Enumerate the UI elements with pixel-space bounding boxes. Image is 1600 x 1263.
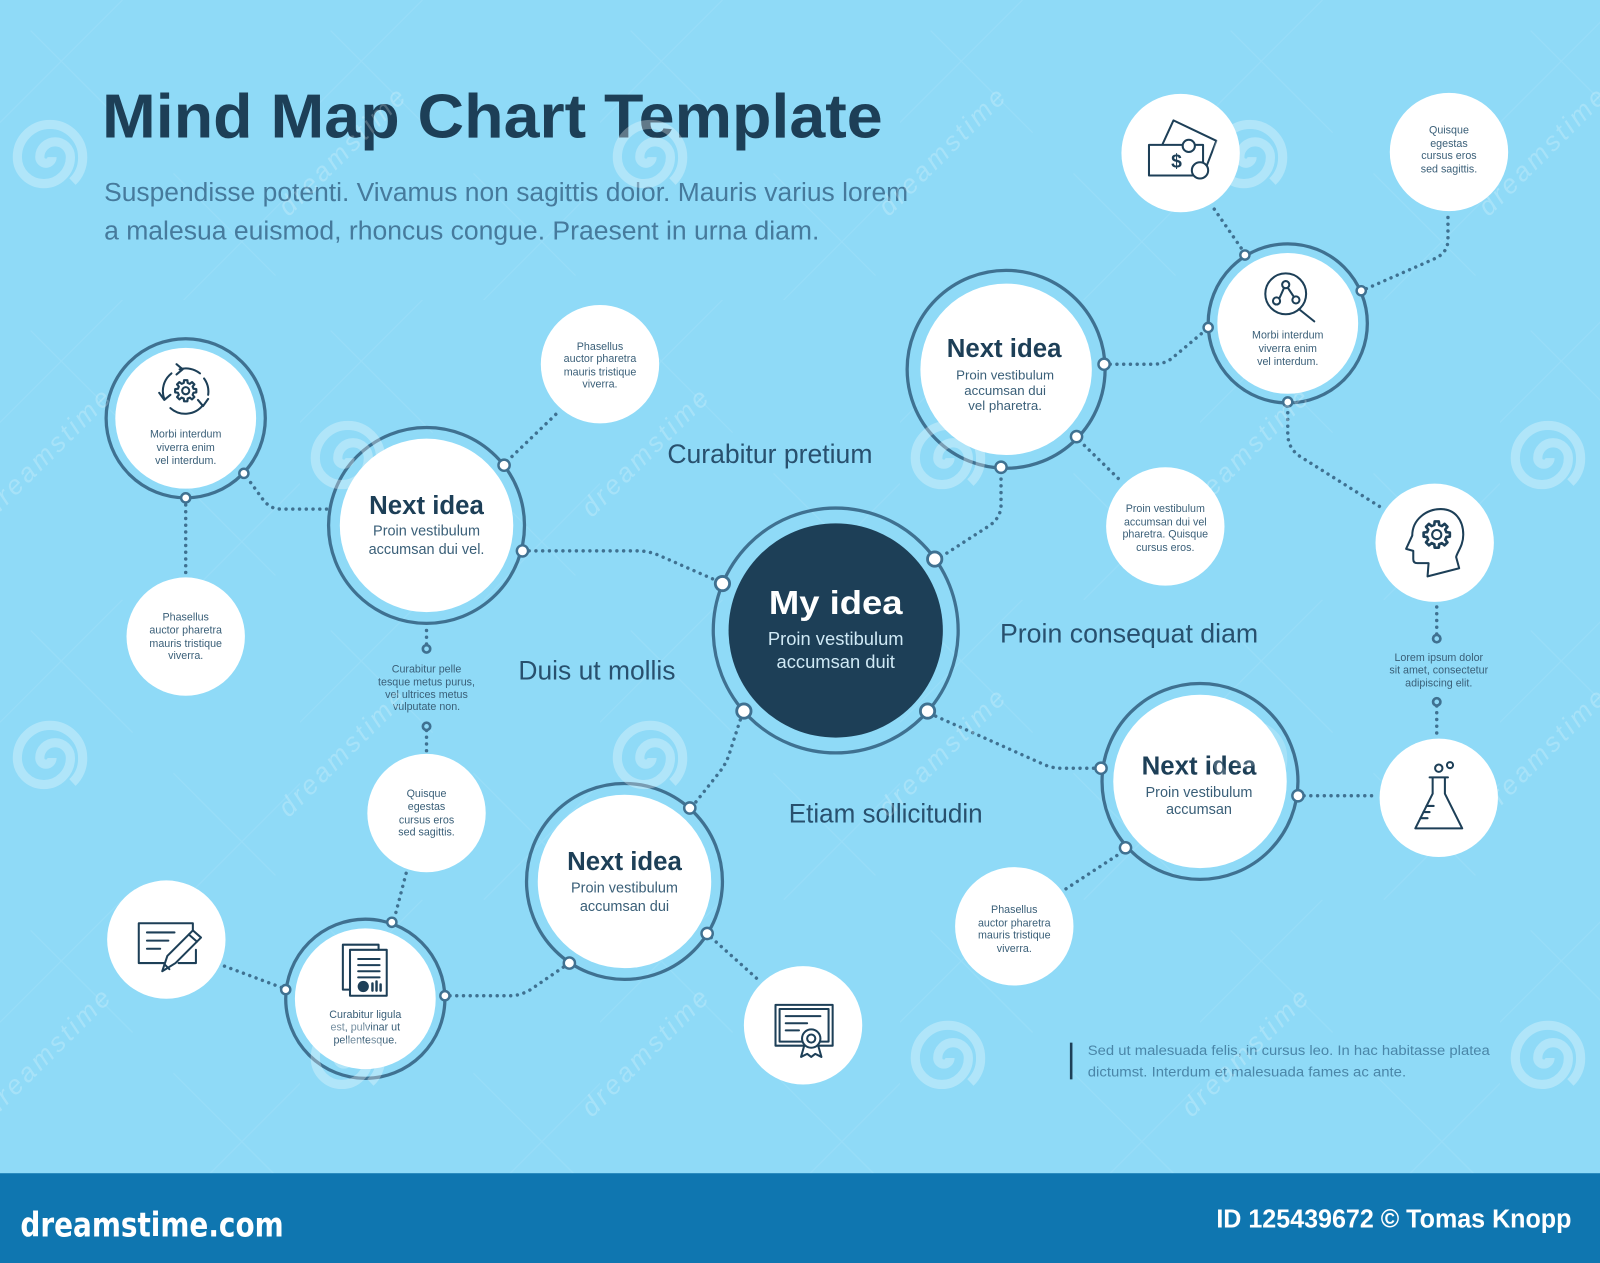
node: top right with search icon: vel interdum. bbox=[1257, 356, 1318, 368]
node: My idea: My idea bbox=[769, 585, 903, 622]
node: Next idea left: accumsan dui vel. bbox=[369, 542, 484, 558]
footnote bbox=[1070, 1043, 1490, 1079]
label: Proin consequat diam: Proin consequat diam bbox=[1000, 619, 1258, 649]
icon: head with gear bbox=[1406, 509, 1463, 576]
bubble: Quisque left: egestas bbox=[408, 801, 445, 813]
floating text: Lorem ipsum: adipiscing elit. bbox=[1405, 678, 1472, 690]
node: bottom left with document icon: pellentesque. bbox=[333, 1035, 397, 1047]
floating text: Curabitur pelle: tesque metus purus, bbox=[378, 677, 475, 689]
subtitle: a malesua euismod, rhoncus congue. Praesent in urna diam. bbox=[104, 218, 819, 246]
node: Next idea bottom: Next idea bbox=[567, 848, 682, 876]
node: Next idea right: Proin vestibulum bbox=[1145, 785, 1252, 801]
bubble: pencil bbox=[107, 880, 226, 999]
node: bottom left with document icon bbox=[281, 918, 449, 1078]
node: Next idea bottom: accumsan dui bbox=[580, 899, 669, 915]
label: Etiam sollicitudin: Etiam sollicitudin bbox=[789, 798, 983, 828]
icon: rotating gear bbox=[159, 364, 208, 414]
bubble: Quisque left: Quisque bbox=[407, 788, 447, 800]
icon: banknotes: $ bbox=[1171, 150, 1182, 172]
bubble: Proin vestibulum: pharetra. Quisque bbox=[1122, 529, 1208, 541]
node: Next idea bottom bbox=[527, 784, 722, 979]
icon: flask bbox=[1415, 762, 1462, 828]
bubble: Phasellus top: auctor pharetra bbox=[564, 353, 636, 365]
floating text: Curabitur pelle: vulputate non. bbox=[393, 701, 460, 713]
bubble: head gear bbox=[1376, 484, 1494, 602]
node: Next idea right: accumsan bbox=[1166, 802, 1232, 818]
node: My idea bbox=[713, 508, 958, 753]
icon: magnifier network bbox=[1265, 273, 1314, 321]
node: Next idea left: Next idea bbox=[369, 492, 485, 520]
bubble: Quisque right: sed sagittis. bbox=[1421, 163, 1477, 175]
node: Next idea right bbox=[1095, 684, 1304, 879]
bubble: Quisque left bbox=[367, 754, 486, 872]
bubble: money bbox=[1121, 94, 1240, 212]
bubble: Phasellus right: Phasellus bbox=[991, 904, 1037, 916]
footnote: dictumst. Interdum et malesuada fames ac ante. bbox=[1088, 1064, 1406, 1079]
subtitle bbox=[104, 179, 908, 246]
node: top left with process icon: vel interdum. bbox=[155, 455, 216, 467]
bubble: Quisque left: cursus eros bbox=[399, 814, 454, 826]
bubble: Phasellus left bbox=[127, 577, 245, 696]
footer banner bbox=[0, 1173, 1600, 1263]
bubble: Quisque right: Quisque bbox=[1429, 125, 1469, 137]
bubble: Quisque left: sed sagittis. bbox=[398, 827, 455, 839]
node: top left with process icon: Morbi interdum bbox=[150, 429, 221, 441]
bubble: certificate bbox=[744, 966, 862, 1084]
watermark overlay: dreamstime bbox=[575, 982, 715, 1122]
title: Mind Map Chart Template bbox=[102, 83, 883, 152]
bubble: Phasellus right: mauris tristique bbox=[978, 930, 1051, 942]
bubble: Proin vestibulum: Proin vestibulum bbox=[1126, 503, 1205, 515]
bubble: Phasellus right: auctor pharetra bbox=[978, 917, 1051, 929]
bubble: flask bbox=[1380, 739, 1498, 857]
icon: document report bbox=[343, 945, 387, 996]
footer credit: ID 125439672 © Tomas Knopp bbox=[1216, 1205, 1571, 1233]
floating text: Curabitur pelle: vel ultrices metus bbox=[385, 689, 468, 701]
node: Next idea left: Proin vestibulum bbox=[373, 524, 480, 540]
bubble: Proin vestibulum: cursus eros. bbox=[1136, 542, 1194, 554]
bubble: Phasellus top: mauris tristique bbox=[564, 366, 636, 378]
icon: certificate bbox=[776, 1005, 833, 1057]
bubble: Quisque right bbox=[1390, 93, 1508, 211]
watermark overlay: dreamstime bbox=[575, 382, 715, 523]
node: Next idea top right bbox=[907, 270, 1110, 473]
footnote: Sed ut malesuada felis, in cursus leo. In hac habitasse platea bbox=[1088, 1043, 1490, 1058]
bubble: Phasellus top bbox=[541, 305, 659, 423]
bubble: Phasellus right: viverra. bbox=[997, 943, 1032, 955]
footer logo: dreamstime.com bbox=[20, 1205, 284, 1244]
watermark overlay: dreamstime bbox=[272, 682, 412, 822]
label: Duis ut mollis: Duis ut mollis bbox=[518, 655, 676, 685]
floating text: Curabitur pelle: Curabitur pelle bbox=[392, 663, 461, 675]
node: top right with search icon: viverra enim bbox=[1259, 343, 1317, 355]
bubble: Quisque right: egestas bbox=[1430, 138, 1468, 150]
bubble: Phasellus right bbox=[955, 867, 1073, 986]
watermark overlay: dreamstime bbox=[872, 81, 1012, 222]
node: My idea: accumsan duit bbox=[777, 651, 895, 672]
bubble: Phasellus left: auctor pharetra bbox=[149, 625, 222, 637]
node: bottom left with document icon: Curabitur ligula bbox=[329, 1009, 401, 1021]
bubble: Proin vestibulum bbox=[1106, 467, 1224, 586]
node: Next idea top right: Next idea bbox=[947, 335, 1062, 363]
subtitle: Suspendisse potenti. Vivamus non sagittis dolor. Mauris varius lorem bbox=[104, 179, 908, 207]
bubble: Phasellus top: viverra. bbox=[582, 379, 618, 391]
bubble: Proin vestibulum: accumsan dui vel bbox=[1124, 516, 1207, 528]
node: Next idea bottom: Proin vestibulum bbox=[571, 881, 678, 897]
bubble: Phasellus top: Phasellus bbox=[577, 341, 623, 353]
node: top right with search icon bbox=[1204, 244, 1367, 407]
floating text: Curabitur pelle bbox=[378, 645, 475, 730]
watermark overlay: dreamstime bbox=[1175, 382, 1315, 523]
node: Next idea top right: Proin vestibulum bbox=[956, 368, 1054, 383]
node: My idea: Proin vestibulum bbox=[768, 628, 904, 649]
bubble: Quisque right: cursus eros bbox=[1421, 150, 1477, 162]
bubble: Phasellus left: mauris tristique bbox=[149, 638, 222, 650]
dotted connectors bbox=[186, 209, 1448, 996]
node: top left with process icon: viverra enim bbox=[157, 442, 215, 454]
bubble: Phasellus left: viverra. bbox=[168, 650, 203, 662]
node: Next idea top right: accumsan dui bbox=[964, 383, 1046, 398]
floating text: Lorem ipsum: sit amet, consectetur bbox=[1389, 664, 1489, 676]
node: bottom left with document icon: est, pulvinar ut bbox=[330, 1021, 400, 1033]
watermark overlay: dreamstime bbox=[272, 81, 412, 222]
floating text: Lorem ipsum bbox=[1389, 635, 1489, 706]
label: Curabitur pretium: Curabitur pretium bbox=[667, 439, 872, 469]
bubble: Phasellus left: Phasellus bbox=[163, 611, 209, 623]
watermark overlay: dreamstime bbox=[1175, 982, 1315, 1122]
icon: pencil and note bbox=[139, 923, 201, 971]
node: Next idea top right: vel pharetra. bbox=[968, 398, 1042, 413]
node: top right with search icon: Morbi interdum bbox=[1252, 330, 1324, 342]
floating text: Lorem ipsum: Lorem ipsum dolor bbox=[1394, 652, 1484, 664]
node: top left with process icon bbox=[106, 339, 265, 502]
node: Next idea left bbox=[329, 427, 528, 623]
node: Next idea right: Next idea bbox=[1142, 752, 1257, 780]
watermark overlay: dreamstime bbox=[872, 682, 1012, 822]
